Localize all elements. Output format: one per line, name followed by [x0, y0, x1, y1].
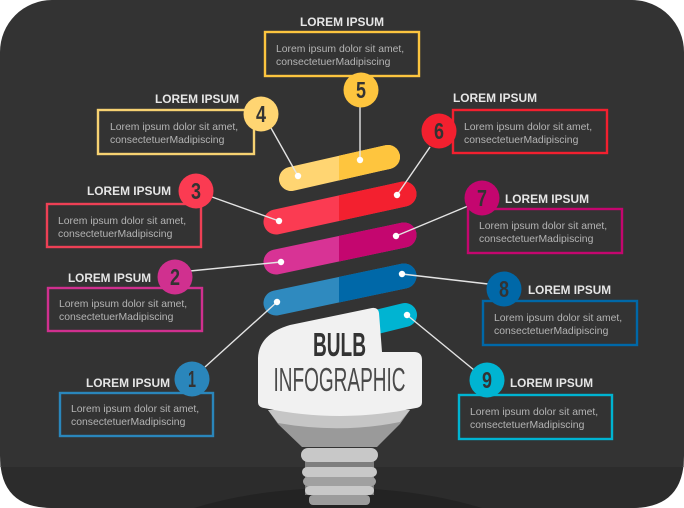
item 8 callout	[399, 271, 637, 345]
item 4 callout: Lorem ipsum dolor sit amet,	[110, 122, 238, 133]
item 4 callout: LOREM IPSUM	[155, 92, 239, 106]
item 1 callout: consectetuerMadipiscing	[71, 417, 186, 428]
item 2 callout: 2	[170, 264, 180, 290]
item 8 callout: LOREM IPSUM	[528, 283, 611, 297]
item 6 callout: 6	[434, 118, 444, 144]
item 9 callout: LOREM IPSUM	[510, 376, 593, 390]
item 7 callout: LOREM IPSUM	[505, 192, 589, 206]
item 7 callout: Lorem ipsum dolor sit amet,	[479, 221, 607, 232]
item 8 callout: 8	[499, 276, 509, 302]
bulb coil: yellow segment	[291, 157, 388, 179]
item 8 callout: Lorem ipsum dolor sit amet,	[494, 313, 622, 324]
item 5 callout	[265, 15, 419, 163]
item 5 callout: 5	[356, 77, 366, 103]
item 3 callout	[47, 174, 282, 247]
item 3 callout: Lorem ipsum dolor sit amet,	[58, 216, 186, 227]
item 6 callout: consectetuerMadipiscing	[464, 135, 579, 146]
item 4 callout	[98, 92, 301, 179]
bulb base: screw thread	[301, 448, 378, 505]
item 3 callout: LOREM IPSUM	[87, 184, 171, 198]
bulb coil: cyan segment	[340, 315, 405, 331]
item 8 callout: consectetuerMadipiscing	[494, 326, 609, 337]
item 5 callout: Lorem ipsum dolor sit amet,	[276, 44, 404, 55]
item 9 callout	[404, 312, 612, 439]
item 7 callout: 7	[477, 185, 487, 211]
bulb base: neck and funnel	[268, 410, 410, 447]
item 7 callout	[393, 180, 622, 253]
item 4 callout: consectetuerMadipiscing	[110, 135, 225, 146]
item 5 callout: LOREM IPSUM	[300, 15, 384, 29]
bulb coil: blue segment	[276, 276, 404, 303]
item 6 callout: LOREM IPSUM	[453, 91, 537, 105]
item 6 callout	[394, 91, 607, 198]
item 6 callout: Lorem ipsum dolor sit amet,	[464, 122, 592, 133]
item 9 callout: Lorem ipsum dolor sit amet,	[470, 407, 598, 418]
item 9 callout: consectetuerMadipiscing	[470, 420, 585, 431]
subtitle: INFOGRAPHIC: INFOGRAPHIC	[274, 361, 406, 398]
item 1 callout	[60, 299, 280, 436]
item 1 callout: 1	[188, 366, 196, 392]
bulb body with title	[258, 308, 422, 416]
item 2 callout: LOREM IPSUM	[68, 271, 151, 285]
item 1 callout: Lorem ipsum dolor sit amet,	[71, 404, 199, 415]
bulb coil: magenta segment	[276, 235, 404, 262]
item 9 callout: 9	[482, 367, 492, 393]
item 3 callout: 3	[191, 178, 201, 204]
item 1 callout: LOREM IPSUM	[86, 376, 170, 390]
item 5 callout: consectetuerMadipiscing	[276, 57, 391, 68]
item 7 callout: consectetuerMadipiscing	[479, 234, 594, 245]
item 2 callout: Lorem ipsum dolor sit amet,	[59, 299, 187, 310]
bulb coil: red segment	[276, 194, 404, 222]
item 4 callout: 4	[256, 101, 266, 127]
item 2 callout: consectetuerMadipiscing	[59, 312, 174, 323]
title: BULB: BULB	[313, 326, 366, 363]
item 2 callout	[48, 259, 284, 331]
item 3 callout: consectetuerMadipiscing	[58, 229, 173, 240]
